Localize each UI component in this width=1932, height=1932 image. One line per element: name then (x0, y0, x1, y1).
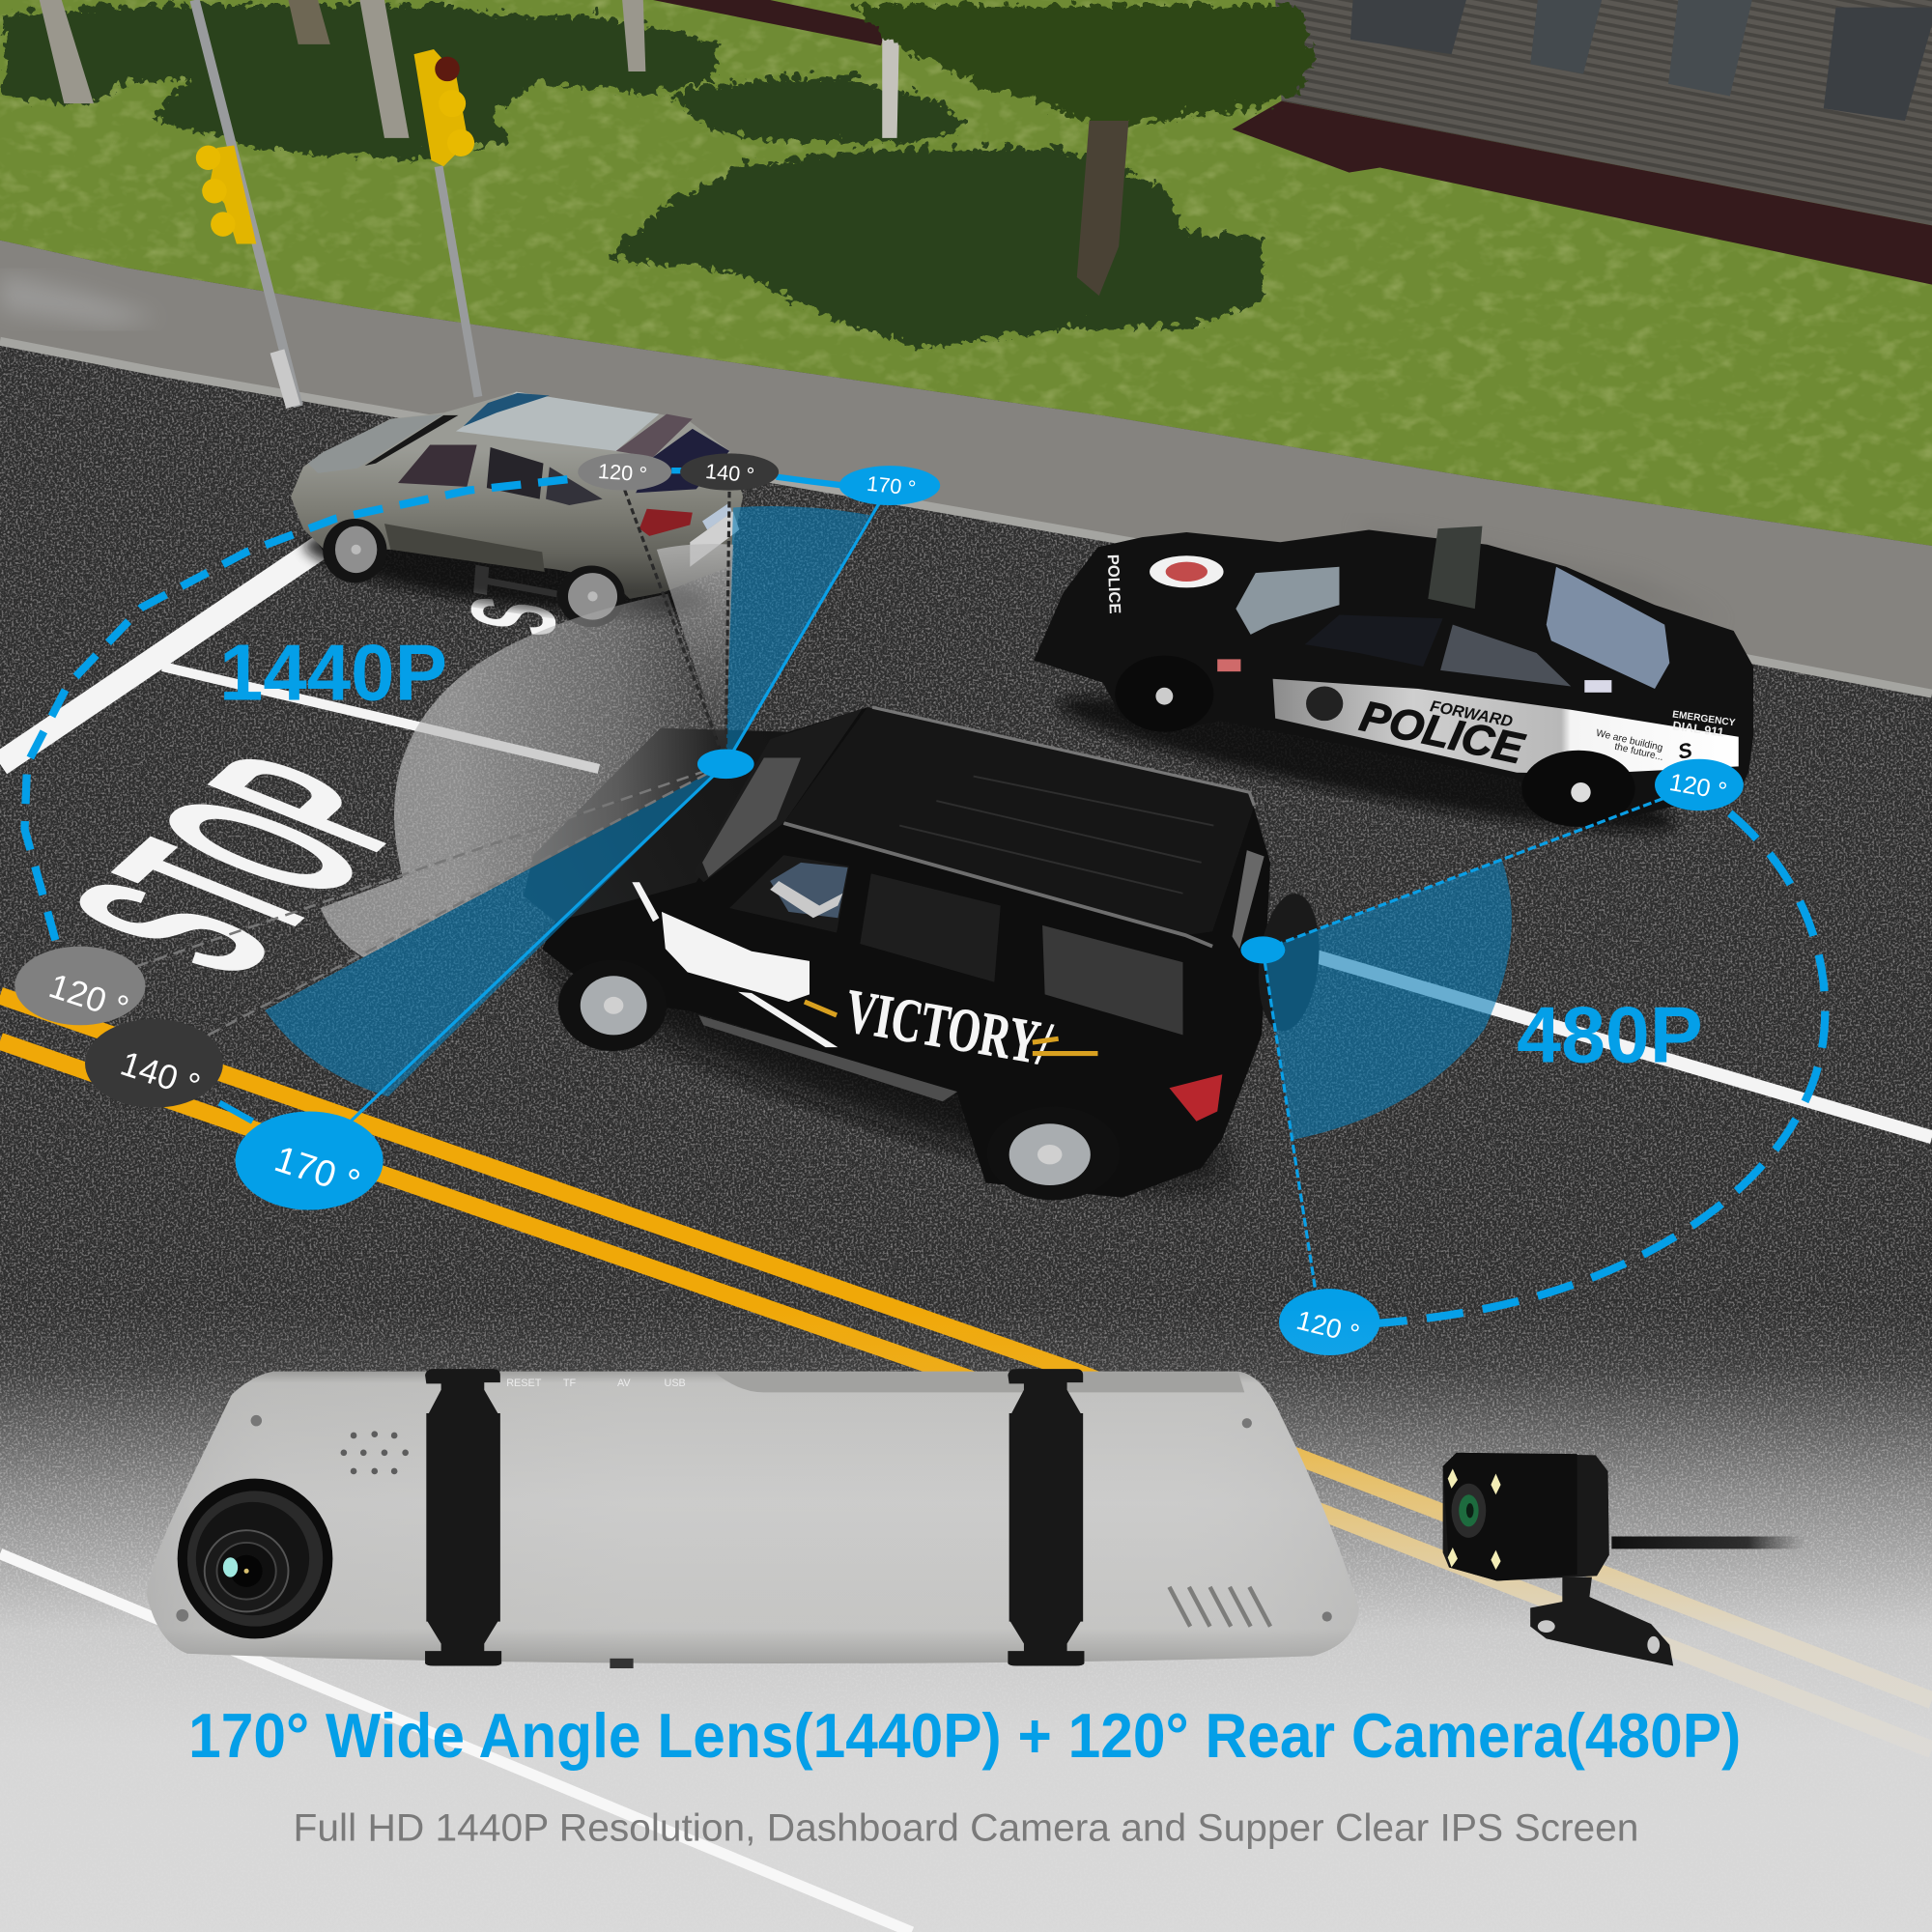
window front (398, 444, 477, 487)
body (1034, 529, 1753, 824)
sidewalk (0, 241, 1932, 694)
windshield (694, 708, 863, 882)
badge: 170 blue far: 170 ° (866, 471, 917, 500)
car: police car (1034, 526, 1753, 855)
tree trunks (40, 0, 899, 138)
badge: 120 rear upper (1655, 759, 1744, 810)
traffic lights (196, 49, 474, 244)
wheel (1521, 751, 1635, 827)
port labels: RESET (506, 1378, 542, 1389)
port labels: AV (617, 1378, 631, 1389)
badge: 120 rear lower (1279, 1289, 1380, 1355)
car: police car: POLICE (1356, 693, 1528, 774)
title: 170° Wide Angle Lens(1440P) + 120° Rear Camera(480P) (188, 1700, 1741, 1771)
badge: 140 dark far (680, 453, 779, 491)
tail light (1169, 1074, 1222, 1122)
product: rear camera (1443, 1453, 1805, 1665)
vents (1169, 1587, 1270, 1627)
livery graphic (632, 882, 838, 1047)
badge: 140 dark far: 140 ° (704, 459, 755, 487)
hub (697, 750, 754, 779)
cone: 170 degree upper (725, 506, 870, 764)
hood (308, 414, 443, 473)
roof (783, 707, 1254, 935)
car: police car: We are building (1595, 728, 1664, 753)
driver (770, 863, 848, 918)
badge: 120 grey far (578, 453, 671, 491)
door panel (1273, 679, 1739, 774)
car: police car: S (1676, 737, 1694, 764)
flags (1217, 659, 1240, 671)
bracket (1530, 1577, 1673, 1665)
badge: 170 blue far (839, 466, 940, 505)
door text: FORWARD (1429, 696, 1515, 730)
road marking: STOP: STOP (11, 726, 470, 1003)
trunk text: POLICE (1104, 554, 1124, 614)
car: police car: DIAL 911 (1671, 718, 1725, 740)
lens (1452, 1484, 1486, 1538)
front glass (1547, 567, 1669, 689)
traffic light poles (195, 0, 478, 407)
light bar (1428, 526, 1482, 609)
port labels: TF (563, 1378, 577, 1389)
arc connectors near top labels (219, 470, 844, 1122)
bottom white road line (0, 1553, 912, 1932)
window rear (1042, 925, 1182, 1035)
lawn tree shadows (0, 0, 1257, 343)
speaker holes (341, 1431, 409, 1474)
wheel (558, 960, 667, 1051)
badge: 170 blue near: 170 ° (270, 1138, 365, 1205)
badge: 120 grey near: 120 ° (44, 966, 133, 1028)
panel: building wall (653, 0, 1932, 285)
body (524, 707, 1270, 1198)
cone: 120 degree grey (394, 594, 725, 877)
port labels: USB (665, 1378, 686, 1389)
label: 480P: 480P (1517, 989, 1703, 1079)
car: black SUV with Victory livery (524, 707, 1325, 1229)
screws (176, 1415, 1332, 1622)
rear pillar highlight (1233, 850, 1264, 949)
window front (729, 855, 849, 933)
wheel (558, 565, 625, 627)
bottom fade panel (0, 1306, 1932, 1932)
badge: 120 grey near (14, 947, 146, 1028)
car: police car: EMERGENCY (1671, 709, 1736, 728)
wheel (323, 519, 387, 582)
car: police car: the future... (1613, 742, 1664, 763)
front camera view cones (80, 486, 890, 1161)
spare wheel (1252, 891, 1325, 1034)
road marking: partial STOP under grey car: ST (446, 560, 584, 644)
tree (850, 0, 1309, 296)
LEDs (1448, 1468, 1501, 1570)
badge: 120 rear lower: 120 ° (1293, 1305, 1362, 1350)
body (291, 392, 743, 599)
car: grey SUV (291, 392, 743, 633)
door shield (1306, 686, 1343, 721)
window middle (860, 873, 1001, 982)
badge (1150, 555, 1224, 587)
product: mirror dash camera (147, 1369, 1359, 1668)
wheel (1115, 656, 1213, 732)
subtitle: Full HD 1440P Resolution, Dashboard Camera and Supper Clear IPS Screen (294, 1807, 1638, 1850)
cone: 140 degree grey lower (321, 764, 725, 957)
badge: 120 rear upper: 120 ° (1667, 769, 1729, 806)
orange streaks (805, 1002, 1097, 1054)
tail light (639, 509, 693, 536)
mount strap left (425, 1369, 501, 1665)
spoiler (616, 414, 693, 457)
badge: 140 dark near (85, 1019, 223, 1108)
VICTORY text: VICTORY/ (840, 976, 1057, 1078)
guide lines (80, 486, 890, 1161)
wheel (987, 1106, 1120, 1200)
panel: lawn (0, 0, 1932, 546)
side window front (1305, 614, 1443, 667)
window quarter (546, 467, 603, 505)
badge: 140 dark near: 140 ° (116, 1044, 205, 1105)
cone: 140 degree grey upper (657, 544, 733, 764)
rear camera view cone (1240, 784, 1699, 1293)
body (1443, 1453, 1609, 1580)
dashed coverage arc: front (25, 478, 579, 940)
lower door (384, 524, 545, 572)
cable (1611, 1538, 1805, 1548)
side window rear (1440, 625, 1571, 686)
mount strap right (1008, 1369, 1084, 1665)
cone: 170 degree lower (265, 764, 725, 1096)
port labels (506, 1378, 686, 1389)
roof (456, 392, 659, 451)
front lens (178, 1479, 332, 1638)
label: 1440P: 1440P (219, 627, 447, 717)
road markings (0, 547, 1932, 1749)
sunroof (464, 393, 550, 426)
window rear (487, 447, 543, 499)
rear window (636, 429, 729, 493)
hood (524, 728, 788, 922)
rear glass (1236, 567, 1339, 635)
dashed coverage arc: rear (1378, 813, 1825, 1323)
badge: 120 grey far: 120 ° (597, 459, 648, 486)
badge: 170 blue near (236, 1112, 384, 1210)
running board (698, 1015, 957, 1101)
